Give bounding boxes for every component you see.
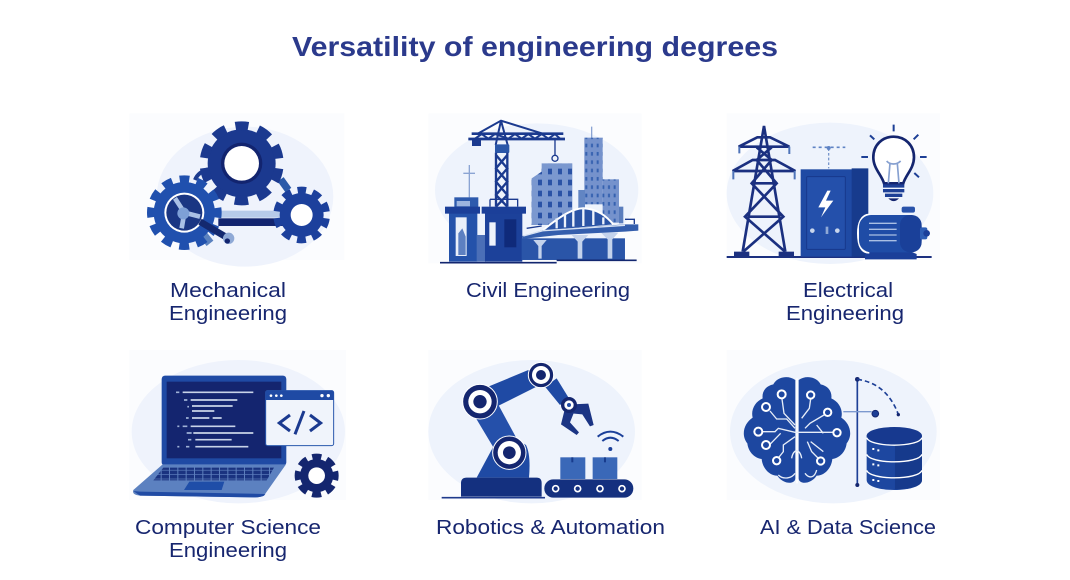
title: Versatility of engineering degrees bbox=[292, 31, 778, 62]
panel: robotics and automation bbox=[428, 350, 665, 539]
icon: brain and database bbox=[727, 350, 940, 503]
label: civil engineering: Civil Engineering bbox=[466, 280, 630, 302]
label: computer science engineering: Engineering bbox=[169, 540, 287, 562]
label: mechanical engineering: Mechanical bbox=[170, 280, 286, 302]
label: electrical engineering: Engineering bbox=[786, 303, 904, 325]
icon: robot arm and conveyor bbox=[428, 350, 642, 503]
label: electrical engineering bbox=[786, 280, 904, 325]
label: computer science engineering bbox=[135, 517, 321, 562]
label: mechanical engineering bbox=[169, 280, 287, 325]
panel: civil engineering bbox=[428, 113, 642, 302]
label: electrical engineering: Electrical bbox=[803, 280, 893, 302]
label: AI and data science: AI & Data Science bbox=[760, 517, 936, 539]
panel: electrical engineering bbox=[727, 113, 940, 325]
label: robotics and automation: Robotics & Automation bbox=[436, 517, 665, 539]
label: computer science engineering: Computer Science bbox=[135, 517, 321, 539]
icon: laptop, code window and gear bbox=[129, 350, 346, 503]
label: mechanical engineering: Engineering bbox=[169, 303, 287, 325]
panel: AI and data science bbox=[727, 350, 940, 539]
icon: gears bbox=[129, 113, 344, 267]
panel: computer science engineering bbox=[129, 350, 346, 562]
icon: pylon, cabinet, bulb and motor bbox=[727, 113, 940, 264]
icon: crane, buildings and bridge bbox=[428, 113, 642, 263]
panel: mechanical engineering bbox=[129, 113, 344, 325]
